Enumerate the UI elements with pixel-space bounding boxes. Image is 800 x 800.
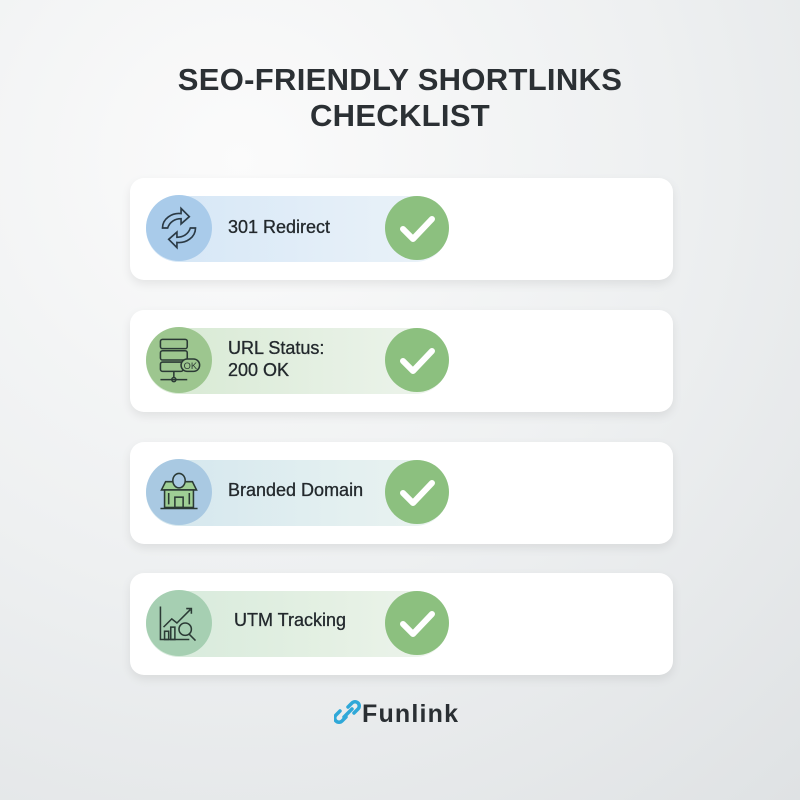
logo: Funlink: Funlink: [362, 700, 458, 728]
title: CHECKLIST: [310, 98, 490, 133]
pill background: [146, 196, 448, 262]
title: SEO-FRIENDLY SHORTLINKS: [178, 62, 622, 97]
pill background: [146, 591, 448, 657]
title: [178, 62, 622, 133]
label: URL Status:: [228, 338, 324, 358]
label: UTM Tracking: [234, 610, 346, 630]
card: branded domain: [130, 442, 673, 544]
label: 301 Redirect: [228, 217, 330, 237]
icon: server OK: OK: [184, 361, 198, 371]
icon: check: [385, 460, 449, 524]
icon: storefront: [146, 459, 212, 525]
card: UTM tracking: [130, 573, 673, 675]
pill background: [146, 460, 448, 526]
label: 200 OK: [228, 360, 289, 380]
icon: server OK: [146, 327, 212, 393]
icon: check: [385, 196, 449, 260]
label: [228, 338, 324, 380]
card: 301 redirect: [130, 178, 673, 280]
icon: redirect arrows: [146, 195, 212, 261]
label: Branded Domain: [228, 480, 363, 500]
card: URL status: [130, 310, 673, 412]
pill background: [146, 328, 448, 394]
icon: check: [385, 328, 449, 392]
icon: chart with magnifier: [146, 590, 212, 656]
icon: check: [385, 591, 449, 655]
